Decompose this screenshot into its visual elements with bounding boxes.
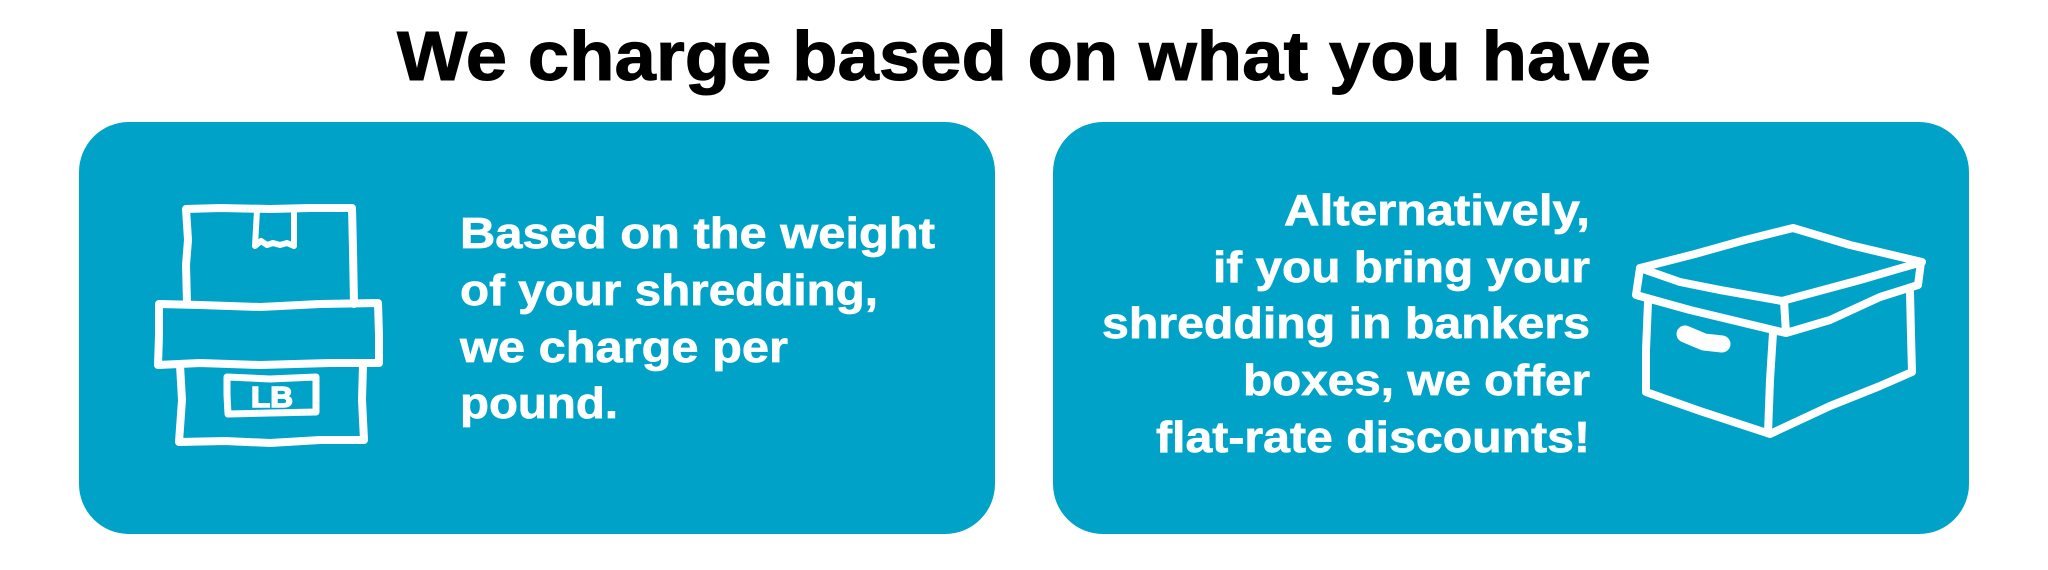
box handle: [1685, 334, 1722, 344]
text: flat-rate explanation: flat-rate discounts!: [1156, 413, 1590, 462]
icon: bankers box: [1636, 228, 1922, 434]
front corner: [1768, 333, 1773, 433]
middle box: [158, 303, 379, 365]
text: weight explanation: Based on the weight: [460, 209, 935, 258]
text: flat-rate explanation: Alternatively,: [1284, 186, 1590, 235]
text: flat-rate explanation: boxes, we offer: [1243, 356, 1590, 405]
bottom box: [179, 365, 364, 443]
text: weight explanation: of your shredding,: [460, 266, 878, 315]
text: flat-rate explanation: if you bring your: [1213, 243, 1590, 292]
panel: bankers boxes discount: [1053, 122, 1969, 534]
text: flat-rate explanation: [1102, 186, 1590, 462]
text: flat-rate explanation: shredding in bankers: [1102, 299, 1590, 348]
weight label: LB: [251, 382, 293, 414]
weight label: [227, 377, 316, 414]
text: weight explanation: we charge per: [459, 323, 788, 372]
tape on top box: [255, 210, 294, 246]
panel: charge by weight: [79, 122, 995, 534]
lid: [1640, 228, 1922, 301]
text: weight explanation: pound.: [460, 379, 618, 428]
top box: [186, 208, 354, 304]
title: We charge based on what you have: [397, 17, 1651, 95]
text: weight explanation: [459, 209, 935, 428]
lid skirt: [1636, 262, 1921, 333]
icon: stacked boxes with LB label: [158, 208, 379, 443]
box body: [1646, 292, 1912, 434]
